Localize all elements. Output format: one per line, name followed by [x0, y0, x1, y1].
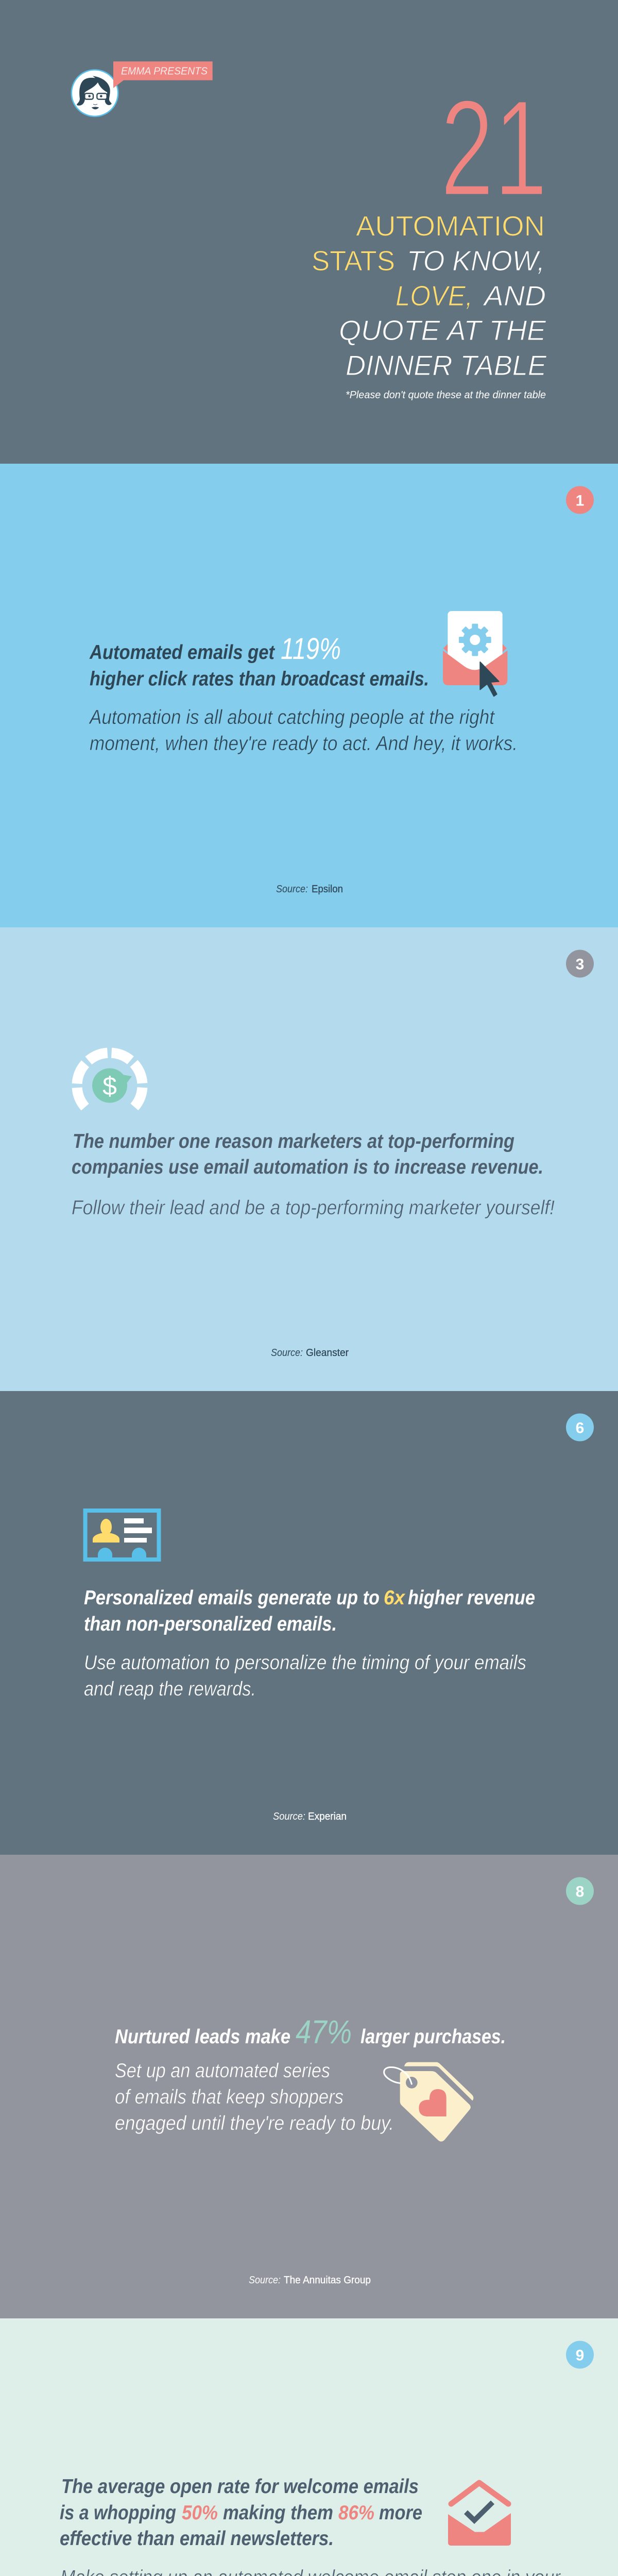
heading: stat 3: companies use email automation is to increase revenue. — [72, 1156, 543, 1178]
heading: title lines: AUTOMATION — [356, 210, 545, 242]
body text: stat 8 — [115, 2060, 394, 2134]
body text: stat 6 — [84, 1652, 526, 1700]
source: Gleanster — [271, 1347, 349, 1359]
logo: Emma face badge — [72, 70, 118, 116]
badge: 3 — [566, 950, 594, 978]
panel: stat 3 — [0, 927, 618, 1391]
badge: 8: 8 — [576, 1884, 584, 1900]
icon: contact card — [85, 1511, 159, 1560]
badge: 1 — [566, 486, 594, 514]
badge: 9: 9 — [576, 2347, 584, 2364]
source: Experian: Experian — [308, 1811, 347, 1822]
heading: title lines: QUOTE AT THE — [339, 314, 546, 346]
big number 21: 21 — [440, 72, 547, 225]
body text: stat 8: of emails that keep shoppers — [115, 2086, 344, 2108]
source: Epsilon: Epsilon — [312, 884, 343, 895]
badge: 6: 6 — [576, 1420, 584, 1436]
heading: stat 6: 6x — [384, 1587, 405, 1609]
heading: title lines: AND — [483, 280, 546, 312]
source: The Annuitas Group — [249, 2275, 371, 2286]
body text: stat 8: Set up an automated series — [115, 2060, 330, 2082]
heading: stat 9: effective than email newsletters. — [60, 2528, 334, 2550]
badge: 3: 3 — [576, 956, 584, 973]
heading: stat 8 — [115, 2013, 506, 2050]
heading: stat 9: The average open rate for welcome emails — [61, 2476, 419, 2498]
heading: stat 1: 119% — [281, 632, 341, 666]
source: Epsilon — [276, 884, 343, 895]
body text: stat 1 — [89, 706, 518, 755]
heading: stat 8: Nurtured leads make — [115, 2026, 290, 2048]
icon: price tag with heart — [384, 2062, 473, 2142]
footnote: *Please don't quote these at the dinner table — [346, 389, 546, 401]
badge: 9 — [566, 2341, 594, 2369]
heading: stat 8: 47% — [296, 2013, 352, 2050]
source: Gleanster: Source: — [271, 1347, 303, 1359]
heading: stat 9: more — [379, 2502, 422, 2524]
panel: stat 1 — [0, 464, 618, 927]
heading: title lines: STATS — [312, 245, 395, 277]
source: Experian: Source: — [273, 1811, 305, 1822]
heading: title lines — [312, 210, 547, 381]
heading: stat 3 — [72, 1130, 543, 1178]
panel: stat 9 — [0, 2318, 618, 2576]
heading: stat 9 — [60, 2476, 422, 2550]
badge: 1: 1 — [576, 493, 584, 509]
heading: stat 9: 86% — [338, 2502, 374, 2524]
panel: title — [0, 0, 618, 464]
badge: 6 — [566, 1414, 594, 1442]
heading: stat 9: making them — [223, 2502, 333, 2524]
heading: stat 3: The number one reason marketers at top-performing — [73, 1130, 514, 1153]
body text: stat 6: Use automation to personalize the timing of your emails — [84, 1652, 526, 1674]
source: Experian — [273, 1811, 347, 1822]
heading: stat 1 — [89, 632, 429, 690]
heading: stat 9: is a whopping — [60, 2502, 176, 2524]
body text: stat 8: engaged until they're ready to buy. — [115, 2112, 394, 2134]
panel: stat 6 — [0, 1391, 618, 1855]
body text: stat 3: Follow their lead and be a top-performing marketer yourself! — [72, 1197, 555, 1219]
speech bubble: Emma presents — [113, 61, 213, 88]
icon: open envelope with check — [448, 2483, 511, 2546]
heading: title lines: TO KNOW, — [407, 245, 545, 277]
heading: stat 9: 50% — [182, 2502, 218, 2524]
heading: stat 6: than non-personalized emails. — [84, 1613, 337, 1635]
source: The Annuitas Group: The Annuitas Group — [284, 2275, 371, 2286]
icon: gauge with dollar bubble — [77, 1053, 142, 1118]
heading: stat 1: Automated emails get — [89, 641, 276, 664]
icon: envelope with gear and cursor — [443, 611, 507, 696]
heading: stat 1: higher click rates than broadcast emails. — [90, 668, 429, 690]
heading: title lines: DINNER TABLE — [346, 349, 547, 381]
heading: stat 8: larger purchases. — [360, 2026, 506, 2048]
source: Gleanster: Gleanster — [306, 1347, 349, 1359]
heading: title lines: LOVE, — [396, 280, 473, 312]
source: The Annuitas Group: Source: — [249, 2275, 281, 2286]
heading: stat 6 — [84, 1587, 535, 1635]
icon: gauge with dollar bubble: $ — [102, 1072, 117, 1100]
badge: 8 — [566, 1877, 594, 1905]
panel: stat 8 — [0, 1855, 618, 2318]
body text: stat 1: Automation is all about catching people at the right — [89, 706, 495, 728]
heading: stat 6: higher revenue — [408, 1587, 535, 1609]
body text: stat 1: moment, when they're ready to act. And hey, it works. — [90, 733, 518, 755]
body text: stat 6: and reap the rewards. — [84, 1678, 256, 1700]
speech bubble: Emma presents: EMMA PRESENTS — [121, 66, 208, 77]
heading: stat 6: Personalized emails generate up to — [84, 1587, 380, 1609]
source: Epsilon: Source: — [276, 884, 308, 895]
